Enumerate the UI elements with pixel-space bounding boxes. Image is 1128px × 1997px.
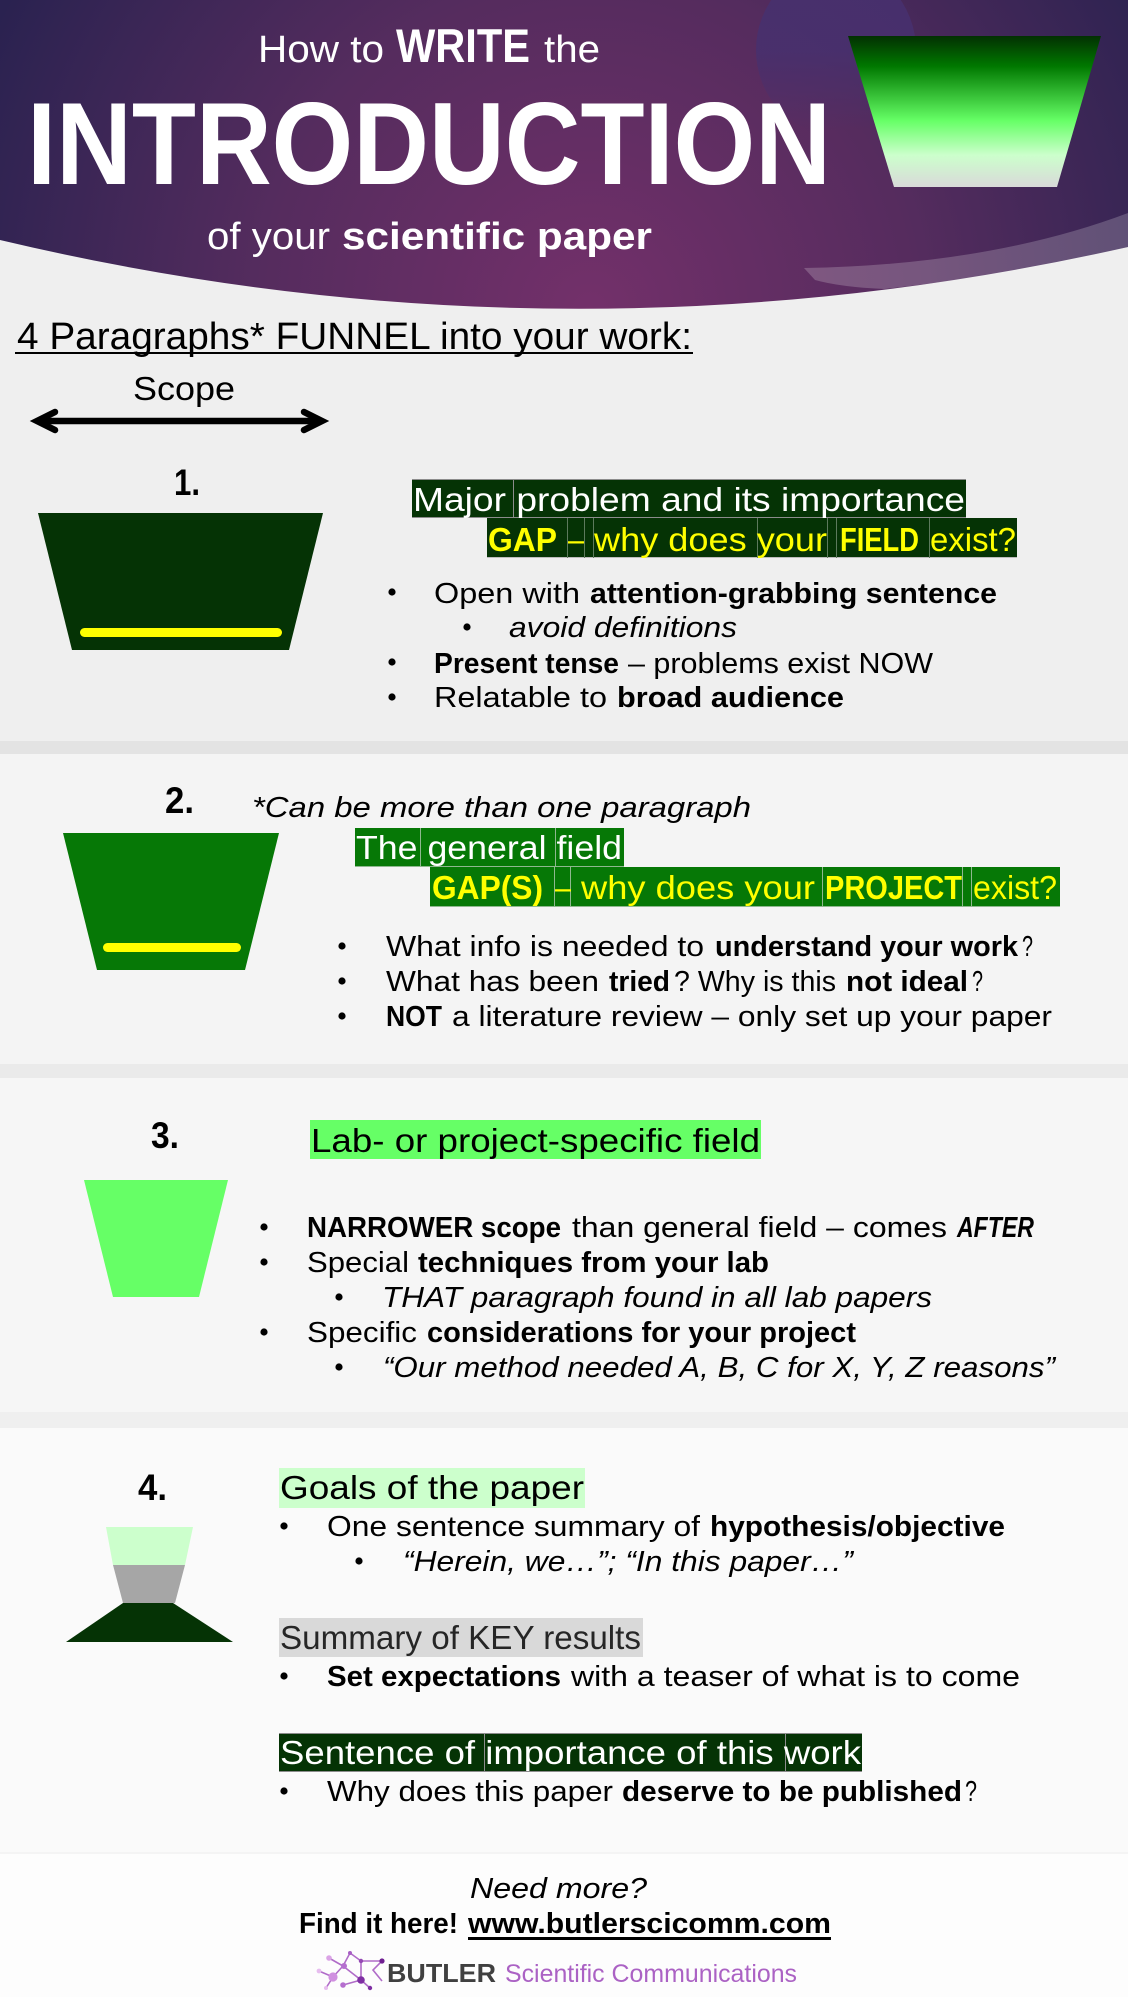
bullets: goals: One sentence summary of [327, 1511, 701, 1543]
heading: project gap: PROJECT [825, 869, 962, 906]
number 1: 1. [174, 462, 200, 503]
bullet list 3: AFTER [956, 1212, 1034, 1244]
bullet list 3: techniques from your lab [418, 1247, 769, 1279]
bullet list 2: ? [972, 966, 983, 998]
title line 2: INTRODUCTION [27, 78, 831, 209]
number 2: 2. [165, 780, 194, 821]
heading: field gap: – [568, 521, 585, 558]
title line 3: scientific paper [342, 216, 652, 258]
bullet list 1: – problems exist NOW [628, 648, 934, 680]
heading: field gap: exist? [930, 521, 1016, 558]
bullet list 3: “Our method needed A, B, C for X, Y, Z reasons” [383, 1352, 1056, 1384]
bullet list 2: What has been [386, 966, 599, 998]
icon: funnel 3 [84, 1180, 228, 1297]
bullets: importance: deserve to be published [622, 1776, 962, 1808]
bullet list 3: Special [307, 1247, 409, 1279]
header banner [0, 0, 1128, 309]
bullets: key results [280, 1661, 1020, 1693]
heading: field gap: FIELD [840, 521, 919, 558]
bullets: key results: with a teaser of what is to come [570, 1661, 1020, 1693]
bullets: goals [280, 1511, 1005, 1578]
title line 1 [258, 19, 600, 72]
bullet list 3 [260, 1212, 1056, 1384]
header swoosh [804, 213, 1128, 289]
logo [317, 1951, 797, 1990]
bullet list 1: avoid definitions [509, 612, 737, 644]
bullet list 2: a literature review – only set up your paper [452, 1001, 1052, 1033]
icon: funnel 2 [63, 833, 279, 970]
icon: scope double arrow [37, 412, 322, 430]
bullet list 1: Relatable to [434, 682, 607, 714]
heading: general field: The general field [356, 829, 622, 866]
call to action [299, 1873, 831, 1940]
bullet list 2: ? Why is this [674, 966, 836, 998]
bullet list 3: THAT paragraph found in all lab papers [382, 1282, 932, 1314]
bullet list 1 [388, 578, 997, 714]
bullet list 2: not ideal [846, 966, 968, 998]
footnote: *Can be more than one paragraph [252, 792, 751, 824]
bullet list 1: attention-grabbing sentence [590, 578, 997, 610]
panel: paragraph 2 [0, 754, 1128, 1064]
icon: funnel 4 [66, 1527, 233, 1642]
bullet list 2: tried [609, 966, 670, 998]
bullet list 3: considerations for your project [427, 1317, 856, 1349]
bullet list 2 [338, 931, 1052, 1033]
bullet list 1: Open with [434, 578, 580, 610]
heading: goals: Goals of the paper [280, 1469, 584, 1506]
call to action: Find it here! [299, 1908, 458, 1940]
title line 3 [207, 216, 652, 258]
heading: field gap [487, 518, 1017, 558]
panel: footer [0, 1854, 1128, 1997]
bullets: goals: “Herein, we…”; “In this paper…” [403, 1546, 854, 1578]
bullet list 3: than general field – comes [572, 1212, 947, 1244]
heading: project gap: – [555, 869, 572, 906]
icon: funnel 1 [38, 513, 323, 650]
title line 3: of your [207, 216, 330, 258]
panel: paragraph 3 [0, 1078, 1128, 1412]
bullets: importance: ? [965, 1776, 977, 1808]
heading: importance: Sentence of importance of this work [280, 1734, 862, 1771]
bullet list 1: broad audience [617, 682, 844, 714]
heading: project gap [430, 867, 1060, 907]
bullet list 2: NOT [386, 1001, 442, 1033]
call to action: www.butlerscicomm.com [467, 1908, 831, 1940]
bullet list 1: Present tense [434, 648, 619, 680]
number 3: 3. [151, 1115, 179, 1156]
bullet list 3: NARROWER scope [307, 1212, 561, 1244]
bullet list 2: understand your work [715, 931, 1019, 963]
scope label: Scope [133, 370, 235, 407]
call to action: Need more? [470, 1873, 648, 1905]
panel: paragraph 4 [0, 1428, 1128, 1852]
heading: key results: Summary of KEY results [280, 1619, 641, 1656]
heading: project gap: why does your [580, 869, 815, 906]
title line 1: WRITE [396, 19, 530, 72]
heading: major problem: Major problem and its importance [413, 481, 965, 518]
logo: BUTLER [387, 1958, 496, 1988]
bullets: importance: Why does this paper [327, 1776, 613, 1808]
heading: field gap: why does your [593, 521, 827, 558]
bullets: key results: Set expectations [327, 1661, 561, 1693]
heading: lab field: Lab- or project-specific field [311, 1122, 760, 1159]
icon: molecule network [317, 1951, 385, 1990]
number 4: 4. [138, 1467, 167, 1508]
heading: project gap: GAP(S) [432, 869, 543, 906]
bullet list 2: ? [1022, 931, 1033, 963]
bullets: goals: hypothesis/objective [710, 1511, 1005, 1543]
heading: field gap: GAP [488, 521, 557, 558]
title line 1: the [544, 29, 600, 71]
panel: paragraph 1 [0, 312, 1128, 741]
bullet list 2: What info is needed to [386, 931, 704, 963]
heading: project gap: exist? [973, 869, 1057, 906]
logo: Scientific Communications [505, 1960, 797, 1988]
icon: gradient funnel [848, 36, 1101, 187]
title line 1: How to [258, 29, 384, 71]
subheading: 4 Paragraphs* FUNNEL into your work: [17, 316, 692, 358]
bullet list 3: Specific [307, 1317, 417, 1349]
bullets: importance [280, 1776, 977, 1808]
